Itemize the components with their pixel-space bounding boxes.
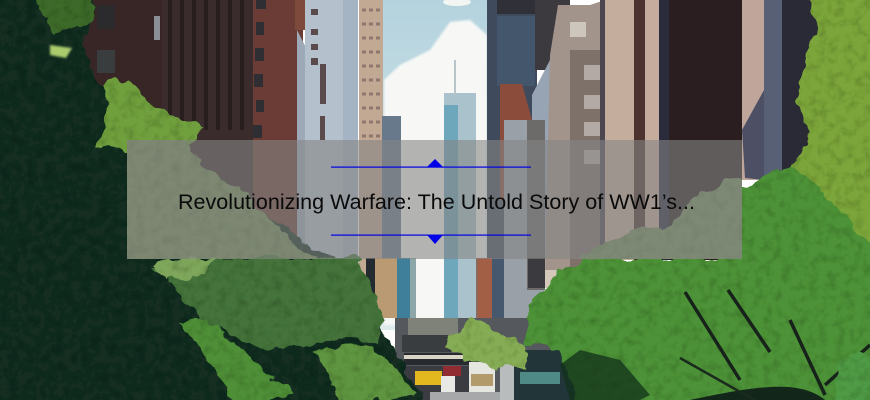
top divider with up arrow [331, 159, 531, 168]
photo: buildings left side [80, 0, 416, 318]
photo: buildings right side [476, 0, 870, 325]
photo: trees right [445, 0, 870, 400]
photo: sky and cloud [370, 0, 500, 330]
overlay-covered bright tree, left [127, 140, 318, 259]
photo: street traffic [395, 318, 580, 400]
title overlay panel [127, 140, 742, 259]
photo: trees left [0, 0, 422, 400]
title text: Revolutionizing Warfare: The Untold Story of WW1’s... [178, 190, 695, 214]
bottom divider with down arrow [331, 234, 531, 244]
overlay-covered bright tree, right [580, 178, 742, 259]
photo: distant central tower [444, 60, 476, 325]
